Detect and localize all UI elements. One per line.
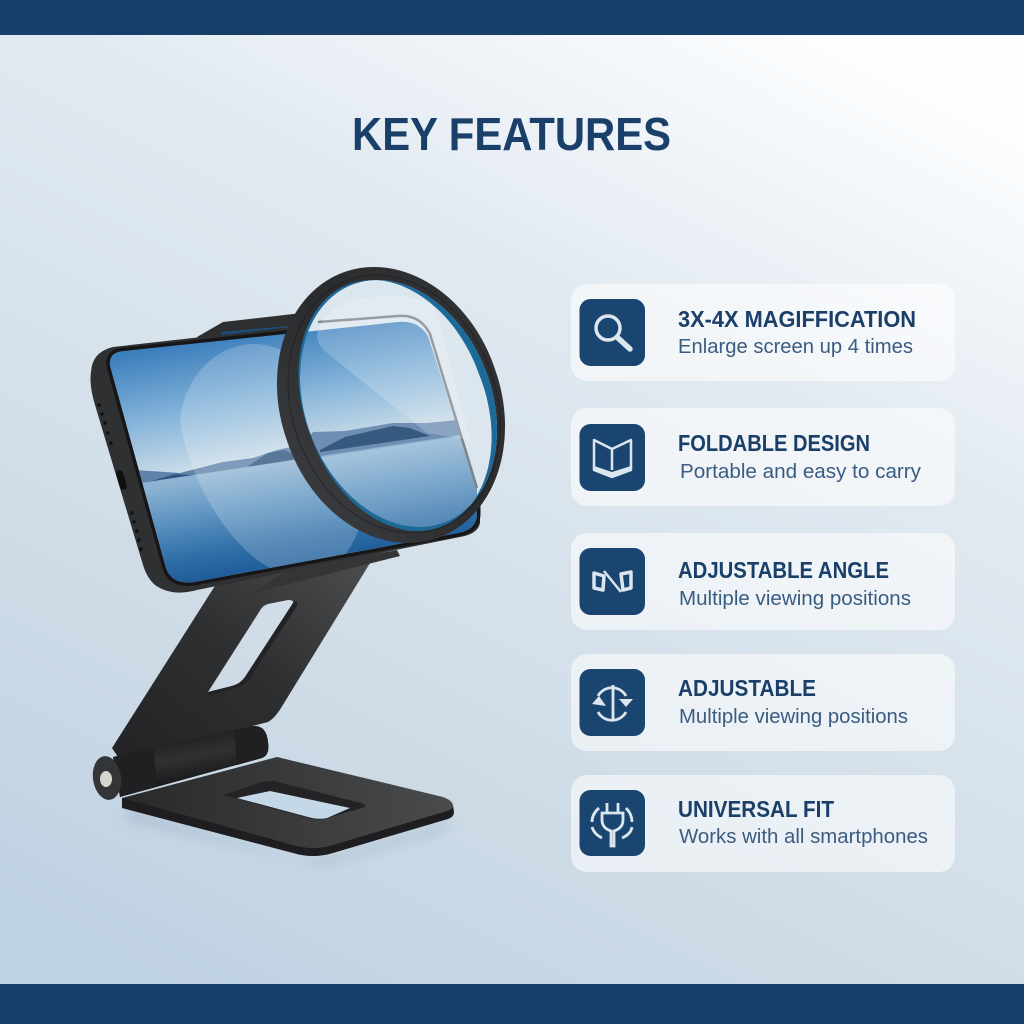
feature card: universal fit <box>571 775 955 872</box>
shadow under stand <box>122 808 455 866</box>
card text <box>678 796 928 848</box>
phone screen: lake scene <box>110 334 477 582</box>
stand base plate <box>122 757 454 856</box>
icon: plug <box>580 790 645 856</box>
phone body <box>90 315 480 593</box>
feature card: adjustable <box>571 654 955 751</box>
title: KEY FEATURES <box>352 108 671 160</box>
card text <box>678 430 922 483</box>
card text: FOLDABLE DESIGN <box>678 430 870 456</box>
feature card: magnification <box>571 284 955 381</box>
icon: rotate <box>580 669 645 736</box>
phone ports <box>97 403 143 551</box>
top band <box>0 0 1024 35</box>
icon: magnifier <box>580 299 645 366</box>
card text: Works with all smartphones <box>679 825 928 848</box>
card text <box>678 557 911 610</box>
lens interior <box>300 310 480 527</box>
stand hinge <box>90 726 268 802</box>
card text <box>678 306 916 358</box>
card text: Multiple viewing positions <box>679 705 908 728</box>
feature card: adjustable angle <box>571 533 955 630</box>
card text <box>678 675 908 728</box>
phone bezel <box>110 322 477 582</box>
icon: angle arrows <box>580 548 645 615</box>
card text: Portable and easy to carry <box>680 460 922 483</box>
card text: ADJUSTABLE <box>678 675 816 701</box>
card text: ADJUSTABLE ANGLE <box>678 557 889 583</box>
feature card: foldable design <box>571 408 955 506</box>
icon: open book <box>580 424 645 491</box>
product: phone stand with magnifier <box>90 245 535 866</box>
card text: UNIVERSAL FIT <box>678 796 834 822</box>
bottom band <box>0 984 1024 1024</box>
lens ring <box>253 245 535 563</box>
stand arm <box>112 555 375 760</box>
bottom clamp <box>253 550 400 593</box>
screen highlight bubble <box>180 344 368 572</box>
top clamp <box>197 310 330 345</box>
lens water tint <box>321 436 477 527</box>
card text: Enlarge screen up 4 times <box>678 335 913 358</box>
card text: Multiple viewing positions <box>679 587 911 610</box>
card text: 3X-4X MAGIFFICATION <box>678 306 916 332</box>
